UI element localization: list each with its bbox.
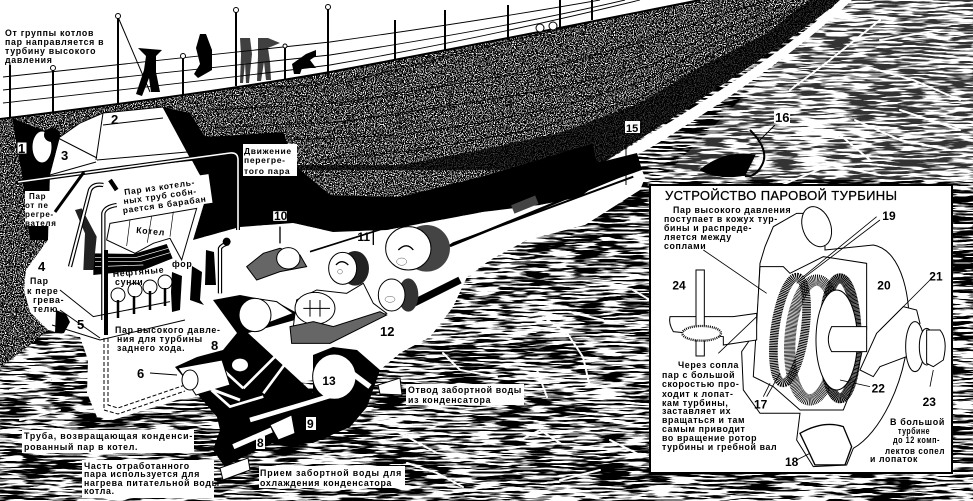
text: through nozzles: самым приводит [662,424,746,434]
label: number 1: 1 [18,141,25,156]
text: high pressure steam: соплами [664,241,706,251]
text: large turbine note: до 12 комп- [893,435,940,445]
text: through nozzles: скоростью про- [662,379,739,389]
text: through nozzles [662,360,777,452]
propeller 16 [700,125,775,177]
numbers 2 to 9 and 15 16: 3 [61,148,68,163]
coupling and shaft 14 [450,135,640,246]
condenser 6 piping [150,360,240,400]
caption: steam to superheater: грева- [33,295,64,305]
caption: steam from tubes [119,174,213,215]
text: through nozzles: Через сопла [678,360,739,370]
turbine numbers: 24 [672,278,686,292]
caption: sea water discharge [406,384,524,405]
caption: superheated steam: Движение [244,146,292,156]
numbers 2 to 9 and 15 16: 8 [257,436,264,450]
turbine numbers: 19 [882,209,896,223]
text: through nozzles: кам турбины, [662,398,728,408]
text: through nozzles: пар с большой [662,370,735,380]
caption: steam from boilers [5,28,104,65]
numbers 2 to 9 and 15 16: 9 [307,417,314,431]
caption: steam from superheater: регре- [25,210,54,219]
panel heading: УСТРОЙСТВО ПАРОВОЙ ТУРБИНЫ [665,188,898,203]
text: high pressure steam [664,205,791,251]
left condenser [239,298,293,332]
numbers 2 to 9 and 15 16 [38,110,790,450]
caption: sea water intake: охлаждения конденсатора [260,478,392,488]
numbers [273,209,394,339]
panel: steam turbine diagram [650,185,952,473]
caption: spent steam part [82,460,220,498]
caption: spent steam part: котла. [84,486,115,496]
caption: steam from boilers: пар направляется в [5,37,104,47]
main condenser 13 [250,354,370,420]
sailors on deck [136,34,316,96]
caption: sea water discharge: Отвод забортной воды [408,385,522,395]
caption: condenser return pipe [22,430,194,453]
caption: steam from tubes: Пар из котель- [123,177,196,197]
ship hull [0,0,850,370]
caption: reverse turbine steam: Пар высокого давле- [115,325,221,335]
caption: steam from superheater: Пар [29,192,46,201]
text: large turbine note: и лопаток [870,454,918,464]
caption: steam from superheater [25,191,57,228]
caption: oil sumps and burners: сунки [115,277,143,287]
text: high pressure steam: Пар высокого давления [673,205,791,215]
text: high pressure steam: ляется между [664,232,732,242]
caption: boiler: Котел [136,225,165,238]
turbine numbers: 21 [929,270,943,284]
deck and railings [0,0,700,119]
numbers 2 to 9 and 15 16: 16 [775,110,789,125]
caption: steam from superheater: от пе [25,201,49,210]
caption: steam from boilers: От группы котлов [5,28,94,38]
turbine numbers: 22 [872,382,885,396]
caption: oil sumps and burners: фор [172,259,192,269]
lower black bilge compartment [175,295,380,467]
caption: steam from boilers: давления [5,55,53,65]
turbine numbers: 18 [785,455,799,469]
left hull dark shadow [12,118,60,240]
high pressure turbine [290,283,387,343]
steam inlet flange [796,202,837,251]
right bearing and shaft end [860,307,945,377]
text: large turbine note: лектов сопел [885,446,945,456]
gear and shaft 24 [670,270,757,356]
caption: steam to superheater: к пере [27,286,59,296]
caption: spent steam part: пара используется для [84,469,200,479]
numbers: 10 [274,209,288,223]
machinery compartment white cutaway [24,107,645,420]
moving blade rings [768,275,857,401]
outer casing [742,213,909,467]
caption: spent steam part: Часть отработанного [84,461,190,471]
turbine numbers: 23 [923,395,936,409]
caption: steam to superheater [27,276,64,314]
cruising turbine [247,248,307,280]
text: through nozzles: турбины и гребной вал [662,442,777,452]
second gear [329,251,369,286]
white wake along hull [603,0,852,168]
caption: condenser return pipe: рованный пар в котел. [24,442,138,452]
caption: reverse turbine steam: заднего хода. [117,343,185,353]
numbers 2 to 9 and 15 16: 6 [137,366,144,381]
text: large turbine note: В большой [890,417,945,427]
text: through nozzles: вращаться и там [662,415,745,425]
boiler structure [18,107,238,340]
text: large turbine note [870,417,945,464]
caption: oil sumps and burners: Нефтяные [112,265,165,279]
caption: reverse turbine steam: ния для турбины [117,334,203,344]
sky [0,0,700,119]
caption: superheated steam [243,144,297,176]
text: large turbine note: турбине [898,426,930,436]
caption: steam from tubes: рается в барабан [122,194,207,215]
feed pump [200,348,297,447]
rotor disc [816,290,857,390]
stokers [55,250,216,333]
turbine numbers: 20 [877,278,891,292]
caption: steam to superheater: Пар [30,276,49,286]
inner casing outline [753,257,867,410]
intake and discharge boxes [220,378,402,480]
text: high pressure steam: бины и распреде- [664,223,752,233]
numbers 2 to 9 and 15 16: 2 [111,112,118,127]
turbine numbers [672,209,943,469]
caption: sea water intake: Прием забортной воды для [260,468,402,478]
caption: steam from tubes: ных труб собн- [123,186,197,206]
numbers 2 to 9 and 15 16: 15 [626,123,638,135]
rotor shaft [828,327,867,352]
exhaust opening [800,424,852,465]
caption: steam from boilers: турбину высокого [5,46,96,56]
caption: sea water intake [259,466,405,488]
caption: spent steam part: нагрева питательной воды [84,478,220,488]
leader lines [703,217,933,460]
text: through nozzles: во вращение ротор [662,433,757,443]
text: through nozzles: ходит к лопат- [662,389,734,399]
text: high pressure steam: поступает в кожух тур- [664,214,778,224]
main condenser 13: 13 [322,374,336,388]
oil burners [104,250,185,414]
caption: superheated steam: перегре- [244,155,286,165]
lighter water at top right [660,0,973,180]
turbine stub at top left [18,128,60,163]
main reduction gears and shafting [200,177,633,447]
caption: reverse turbine steam [115,325,221,353]
numbers 2 to 9 and 15 16: 4 [38,259,46,274]
large main gear [386,225,450,272]
numbers: 12 [380,324,394,339]
third gear [378,278,418,312]
caption: steam to superheater: телю [33,304,58,314]
turbine numbers: 17 [754,397,768,411]
caption: condenser return pipe: Труба, возвращающая конденси- [24,431,193,441]
caption: superheated steam: того пара [244,166,290,176]
caption: oil sumps and burners [112,259,192,287]
numbers 2 to 9 and 15 16: 8 [211,338,218,353]
caption: sea water discharge: из конденсатора [408,395,491,405]
numbers: 11 [357,230,370,244]
text: through nozzles: заставляет их [662,406,731,416]
numbers 2 to 9 and 15 16: 5 [77,317,84,332]
caption: steam from superheater: вателя [25,219,57,228]
black void under the hull [163,107,642,240]
turbine cutaway drawing [670,202,945,469]
boiler with tubes [60,180,231,320]
